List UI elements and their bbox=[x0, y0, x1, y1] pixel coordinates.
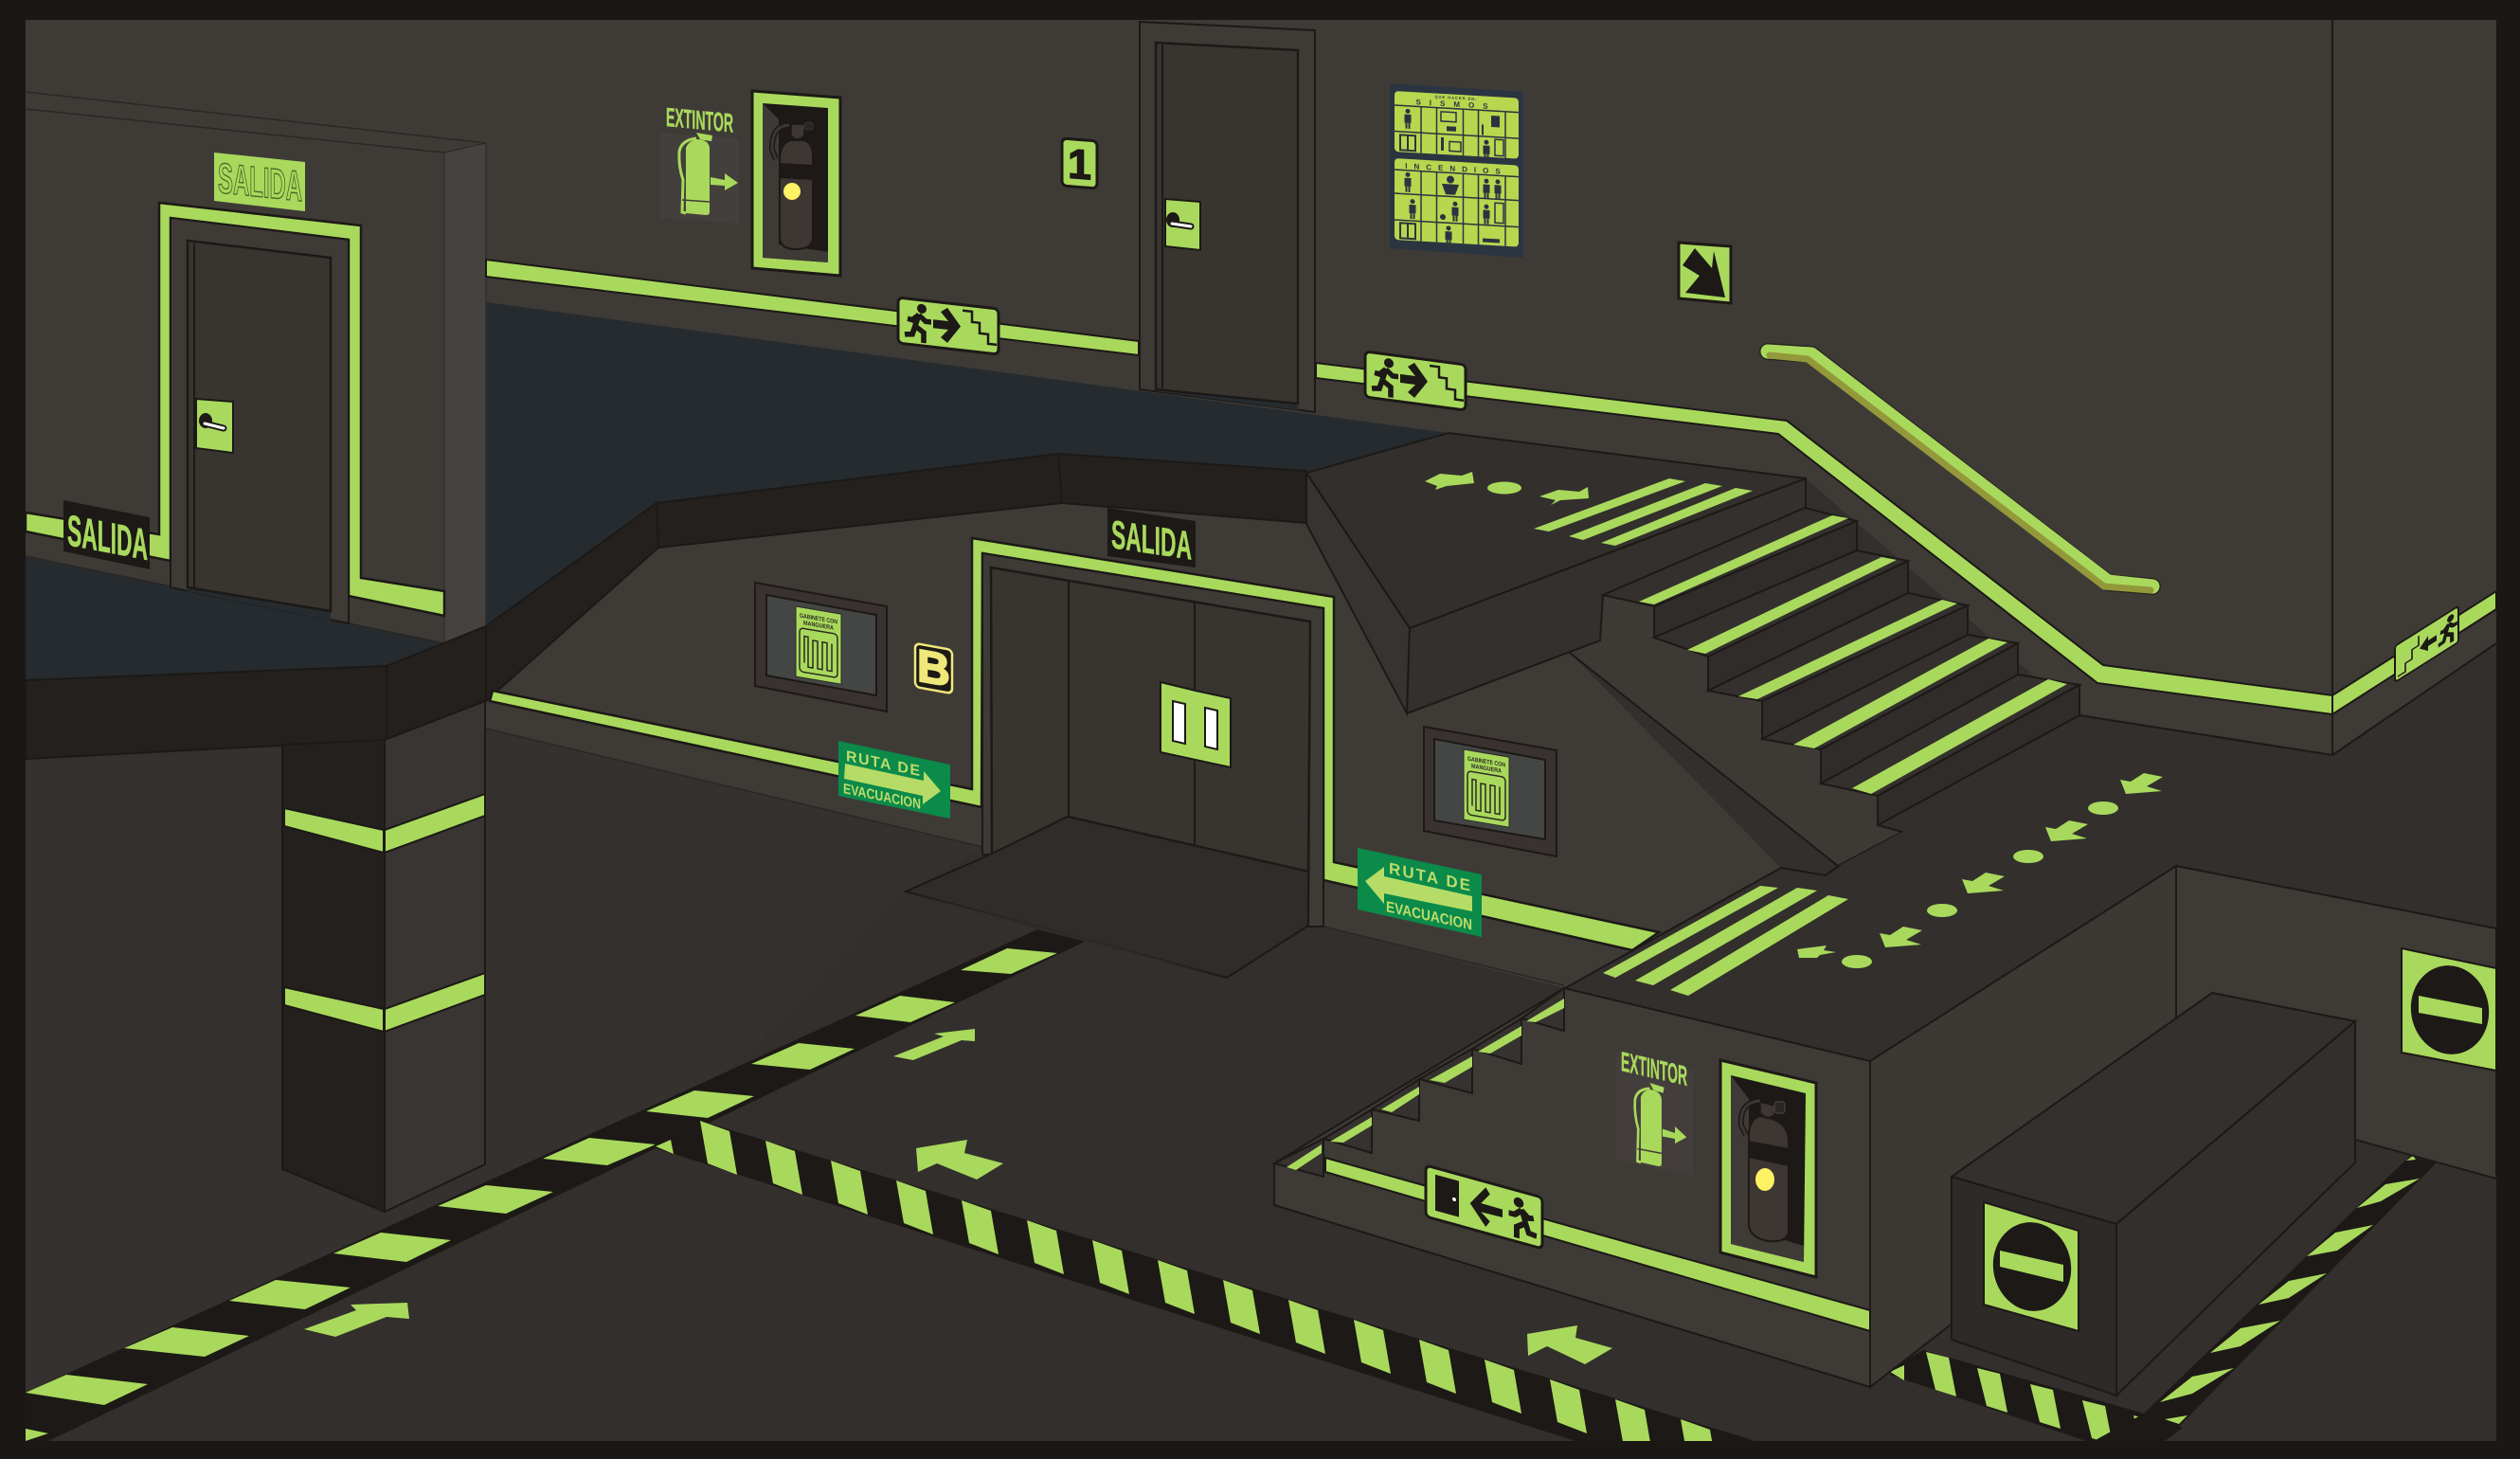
incendios panel: INCENDIOS bbox=[1405, 162, 1507, 176]
floor arrow 4 bbox=[1527, 1325, 1612, 1364]
tread 1 bbox=[1603, 508, 1857, 606]
landing front face bbox=[1407, 478, 1806, 713]
incendios panel bbox=[1395, 158, 1519, 250]
stair stripes bbox=[1639, 515, 2067, 794]
block step stripes bbox=[1287, 999, 1564, 1170]
diagonal arrow sign bbox=[1679, 243, 1731, 303]
floor arrow 3 bbox=[916, 1140, 1003, 1180]
block step triangles bbox=[1274, 988, 1564, 1177]
left wall side face bbox=[444, 143, 486, 643]
floor tape right of bench bbox=[2094, 1156, 2437, 1441]
landing top bbox=[1306, 433, 1806, 628]
upper carpet bbox=[486, 302, 1449, 626]
no entry sign right bbox=[2402, 948, 2496, 1071]
leaf bbox=[1156, 43, 1298, 404]
SALIDA low sign left bbox=[63, 500, 150, 569]
ruta de evacuacion sign left: RUTA DE bbox=[846, 748, 920, 780]
exit sign 1 bbox=[898, 297, 999, 354]
sismos panel: QUE HACER EN: bbox=[1435, 94, 1477, 101]
block green stripe bbox=[1325, 1158, 1870, 1331]
platform edge lines bbox=[1565, 866, 1839, 988]
path arrows and dots on floor bbox=[1797, 773, 2163, 968]
upper extinguisher cabinet bbox=[752, 91, 840, 276]
tread 4 bbox=[1762, 635, 2018, 749]
lower extintor sign: EXTINTOR bbox=[1621, 1046, 1687, 1092]
ruta de evacuacion sign left bbox=[838, 741, 950, 819]
bench bbox=[1952, 993, 2355, 1396]
handle plate bbox=[196, 399, 233, 453]
handle plate bbox=[1165, 199, 1200, 250]
SALIDA sign above left door bbox=[214, 153, 305, 211]
platform stripes bbox=[1603, 886, 1848, 996]
landing stripes bbox=[1534, 478, 1753, 546]
central green stripe and door frame line bbox=[490, 538, 1659, 950]
pillar right face bbox=[385, 701, 485, 1212]
stair side wall bbox=[1570, 595, 1902, 866]
tread 3 bbox=[1708, 593, 1968, 701]
staircase bbox=[1603, 508, 2079, 825]
left carpet bbox=[26, 557, 441, 679]
exit sign corner bbox=[2395, 606, 2458, 682]
frame bbox=[1140, 22, 1315, 412]
floor tape left diagonal bbox=[26, 929, 1089, 1441]
extinguisher body bbox=[1749, 1116, 1789, 1241]
corner edge bbox=[2331, 695, 2333, 713]
door handles bbox=[1161, 682, 1231, 767]
hose cabinet left bbox=[755, 583, 887, 711]
exit sign lower bbox=[1426, 1165, 1542, 1249]
lower left floor tone bbox=[26, 729, 982, 1393]
corner line of right wall bbox=[2331, 20, 2333, 755]
hose cabinet right bbox=[1424, 727, 1557, 856]
poster: que hacer en sismos e incendios bbox=[1390, 83, 1523, 258]
block right face bbox=[1870, 866, 2176, 1387]
room number 1 sign bbox=[1062, 138, 1097, 189]
floor tape near bench front bbox=[1890, 1350, 2183, 1459]
SALIDA sign above left door: SALIDA bbox=[218, 153, 302, 210]
pillar band upper bbox=[284, 794, 485, 853]
ruta de evacuacion sign right: RUTA DE bbox=[1389, 858, 1470, 895]
stair side lines bbox=[1570, 653, 1902, 866]
SALIDA low sign left: SALIDA bbox=[67, 505, 148, 569]
carpet under door bbox=[1156, 389, 1298, 410]
floor arrow 2 bbox=[893, 1029, 975, 1060]
right wall base lines bbox=[2079, 643, 2496, 755]
door recess bbox=[991, 567, 1310, 872]
landing arrows and dot bbox=[1425, 472, 1589, 505]
door floor mat bbox=[906, 817, 1308, 978]
lower extinguisher cabinet bbox=[1720, 1060, 1816, 1277]
frame bbox=[982, 553, 1323, 927]
lower wall bbox=[486, 503, 1781, 988]
room number 1 sign: 1 bbox=[1068, 141, 1091, 189]
landing left face bbox=[1306, 473, 1410, 713]
ruta de evacuacion sign left: EVACUACION bbox=[843, 781, 921, 813]
pillar left face bbox=[282, 740, 385, 1212]
door leaf bbox=[188, 241, 331, 611]
B level sign: B bbox=[917, 640, 950, 697]
floor tape front diagonal bbox=[653, 1120, 1753, 1459]
SALIDA sign centre: SALIDA bbox=[1111, 512, 1192, 568]
pillar band lower bbox=[284, 973, 485, 1032]
door mat redraw over tape end bbox=[906, 892, 1227, 978]
right wall bbox=[2176, 866, 2496, 1179]
lower wall floor line bbox=[486, 729, 982, 847]
upper extintor sign bbox=[667, 108, 738, 215]
sismos panel: SISMOS bbox=[1415, 98, 1497, 111]
lower platform top bbox=[1565, 832, 2176, 1061]
block front face bbox=[1274, 988, 1870, 1387]
green door outline stripe bbox=[26, 203, 444, 616]
upper wall bbox=[26, 20, 2496, 755]
ruta de evacuacion sign right bbox=[1358, 848, 1482, 937]
pillar bbox=[282, 701, 485, 1212]
exit sign 2 bbox=[1365, 351, 1466, 410]
landing bbox=[1306, 433, 1806, 713]
no entry sign on bench bbox=[1984, 1202, 2079, 1331]
bench top bbox=[1952, 993, 2355, 1224]
bench front face bbox=[1952, 1177, 2116, 1396]
double door assembly bbox=[982, 553, 1323, 927]
tread 2 bbox=[1654, 550, 1908, 657]
ledge band bbox=[26, 454, 1306, 759]
bench right face bbox=[2116, 1021, 2355, 1396]
tread 5 bbox=[1821, 675, 2079, 796]
lower extintor sign bbox=[1615, 1046, 1693, 1177]
floor arrow 1 bbox=[304, 1303, 409, 1337]
upper left green stripe bbox=[486, 260, 1139, 355]
handrail bbox=[1768, 351, 2152, 590]
extinguisher body bbox=[780, 140, 813, 249]
long right green stripe bbox=[1316, 363, 2496, 714]
upper door assembly bbox=[1140, 22, 1315, 412]
door frame bbox=[171, 218, 349, 623]
SALIDA sign centre bbox=[1107, 508, 1196, 568]
sismos panel bbox=[1395, 91, 1519, 162]
left wall top edge bbox=[26, 92, 486, 643]
left door assembly bbox=[26, 203, 444, 623]
floor base bbox=[49, 455, 2496, 1441]
upper extintor sign: EXTINTOR bbox=[666, 102, 733, 138]
carpet under door bbox=[188, 587, 331, 621]
ruta de evacuacion sign right: EVACUACION bbox=[1386, 898, 1472, 934]
